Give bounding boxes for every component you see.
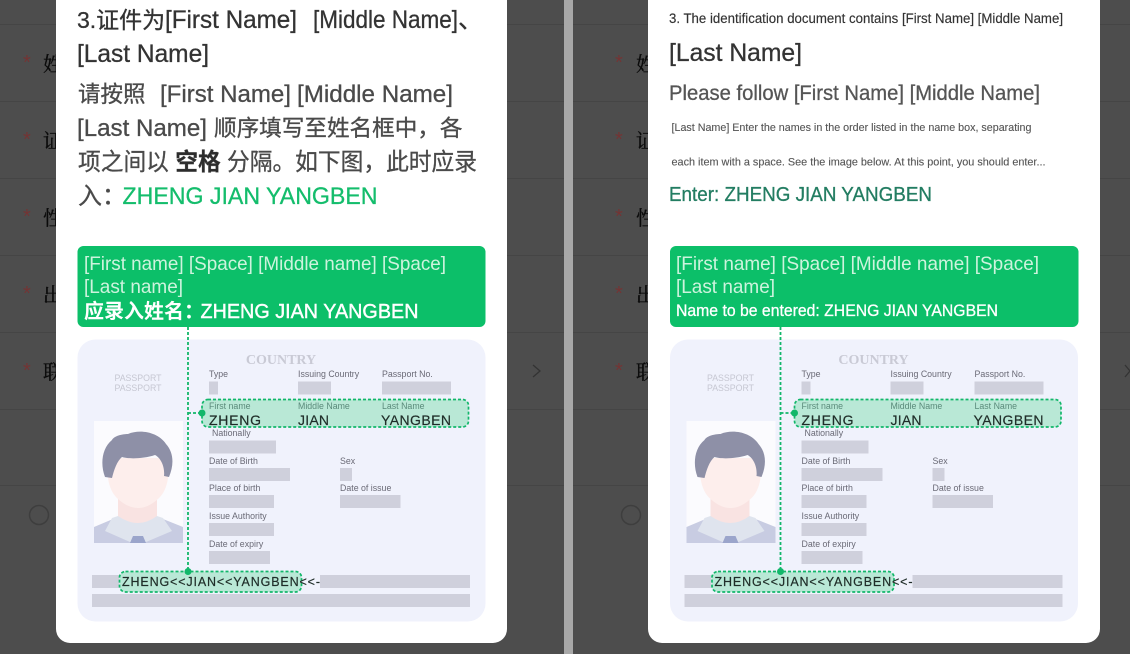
passport illustration: Nationally <box>212 428 251 438</box>
passport illustration: Type <box>209 369 228 379</box>
heading: Chinese step 3: 3.证件为 <box>77 7 165 33</box>
heading: Chinese step 3: [Last Name] <box>77 40 209 68</box>
highlighted name fields: Last Name <box>382 401 425 411</box>
left background form: 姓 <box>43 53 63 76</box>
heading: English step 3: [Last Name] <box>669 39 802 67</box>
green formula banner <box>78 246 486 327</box>
highlighted name fields: Middle Name <box>890 401 942 411</box>
passport illustration: Issue Authority <box>802 511 860 521</box>
right background form <box>615 52 1130 524</box>
passport illustration: Date of issue <box>932 483 984 493</box>
passport illustration: PASSPORT <box>114 383 162 393</box>
heading: Chinese step 3: [Middle Name] <box>313 6 458 34</box>
green formula banner: [First name] [Space] [Middle name] [Space] <box>84 253 446 275</box>
instructions text: ZHENG JIAN YANGBEN <box>122 183 378 210</box>
green formula banner: [First name] [Space] [Middle name] [Space] <box>676 253 1039 275</box>
id photo <box>94 421 183 543</box>
passport illustration: Type <box>802 369 821 379</box>
center divider <box>564 0 573 654</box>
passport illustration: Passport No. <box>974 369 1025 379</box>
right background form: * <box>615 206 623 228</box>
right background form: * <box>615 360 623 382</box>
highlighted name fields: ZHENG <box>209 412 261 428</box>
passport illustration: Issue Authority <box>209 511 267 521</box>
passport illustration: Place of birth <box>209 483 260 493</box>
highlighted MRZ line: ZHENG<<JIAN<<YANGBEN<<- <box>714 575 912 589</box>
left background form: * <box>23 52 31 74</box>
left background form: 联 <box>43 361 63 384</box>
passport illustration: Passport No. <box>382 369 433 379</box>
instructions text: each item with a space. See the image below. At this point, you should enter... <box>672 156 1046 168</box>
highlighted name fields <box>202 400 468 428</box>
right background form: 联 <box>636 361 656 384</box>
passport illustration <box>670 327 1078 622</box>
instructions text: [Middle Name] <box>297 81 453 108</box>
highlighted MRZ line: ZHENG<<JIAN<<YANGBEN<<- <box>122 575 320 589</box>
passport illustration: COUNTRY <box>838 353 909 368</box>
passport illustration: Date of expiry <box>802 539 856 549</box>
passport illustration: Date of expiry <box>209 539 264 549</box>
id photo <box>686 421 776 543</box>
heading: English step 3: 3. The identification document contains [First Name] [Middle Name] <box>669 11 1063 26</box>
highlighted name fields: Last Name <box>974 401 1017 411</box>
highlighted name fields: YANGBEN <box>974 412 1044 428</box>
passport illustration: Sex <box>340 456 356 466</box>
passport illustration: Place of birth <box>802 483 853 493</box>
green formula banner: ZHENG JIAN YANGBEN <box>200 301 418 323</box>
highlighted name fields: Middle Name <box>298 401 350 411</box>
passport illustration: PASSPORT <box>707 383 754 393</box>
instructions text: [First Name] <box>160 81 291 108</box>
passport illustration: Issuing Country <box>890 369 952 379</box>
heading: Chinese step 3: 、 <box>458 6 483 34</box>
green formula banner: Name to be entered: ZHENG JIAN YANGBEN <box>676 301 998 320</box>
left background form: * <box>23 206 31 228</box>
right background form: 性 <box>636 207 656 230</box>
passport illustration: Date of Birth <box>802 456 851 466</box>
left background form: * <box>23 360 31 382</box>
right background form: 出 <box>636 284 656 307</box>
highlighted MRZ line <box>712 572 912 592</box>
panel: English instructions <box>648 0 1100 643</box>
instructions text <box>669 81 1046 168</box>
right background form: * <box>615 129 623 151</box>
highlighted name fields: First name <box>209 401 251 411</box>
right background form: * <box>615 52 623 74</box>
green formula banner: [Last name] <box>676 276 775 298</box>
passport illustration <box>78 327 486 622</box>
green formula banner: 应录入姓名： <box>84 299 204 323</box>
passport illustration: Date of Birth <box>209 456 258 466</box>
passport illustration: PASSPORT <box>114 373 162 383</box>
passport illustration: Nationally <box>804 428 844 438</box>
passport illustration: Date of issue <box>340 483 391 493</box>
left background form: * <box>23 283 31 305</box>
connector lines <box>184 327 206 575</box>
instructions text: Please follow [First Name] [Middle Name] <box>669 81 1040 105</box>
left background form: 出 <box>43 284 63 307</box>
passport illustration: Sex <box>932 456 948 466</box>
right background form: * <box>615 283 623 305</box>
highlighted name fields <box>794 400 1061 428</box>
panel: Chinese instructions <box>56 0 507 643</box>
passport illustration: COUNTRY <box>246 353 316 368</box>
instructions text: 顺序填写至姓名框中，各 <box>214 116 463 141</box>
passport illustration: Issuing Country <box>298 369 360 379</box>
instructions text: 请按照 <box>78 82 146 107</box>
instructions text: 项之间以 空格 分隔。如下图，此时应录 <box>78 149 477 176</box>
highlighted name fields: JIAN <box>890 412 922 428</box>
highlighted MRZ line <box>120 572 320 592</box>
left background form: 性 <box>43 207 63 230</box>
instructions text: 入： <box>78 183 126 210</box>
instructions text <box>77 81 477 210</box>
instructions text: [Last Name] Enter the names in the order listed in the name box, separating <box>672 122 1032 134</box>
passport illustration: PASSPORT <box>707 373 754 383</box>
connector lines <box>777 327 798 575</box>
green formula banner <box>670 246 1078 327</box>
highlighted name fields: JIAN <box>298 412 329 428</box>
heading: English step 3 <box>669 11 1063 67</box>
highlighted name fields: ZHENG <box>802 412 854 428</box>
heading: Chinese step 3: [First Name] <box>165 6 297 34</box>
green answer text: Enter: ZHENG JIAN YANGBEN <box>669 183 932 206</box>
instructions text: [Last Name] <box>77 115 207 142</box>
highlighted name fields: YANGBEN <box>381 412 451 428</box>
left background form <box>23 52 540 524</box>
heading: Chinese step 3 <box>77 6 483 68</box>
right background form: 证 <box>636 130 656 153</box>
left background form: 证 <box>43 130 63 153</box>
right background form: 姓 <box>636 53 656 76</box>
green formula banner: [Last name] <box>84 276 183 298</box>
highlighted name fields: First name <box>802 401 843 411</box>
left background form: * <box>23 129 31 151</box>
